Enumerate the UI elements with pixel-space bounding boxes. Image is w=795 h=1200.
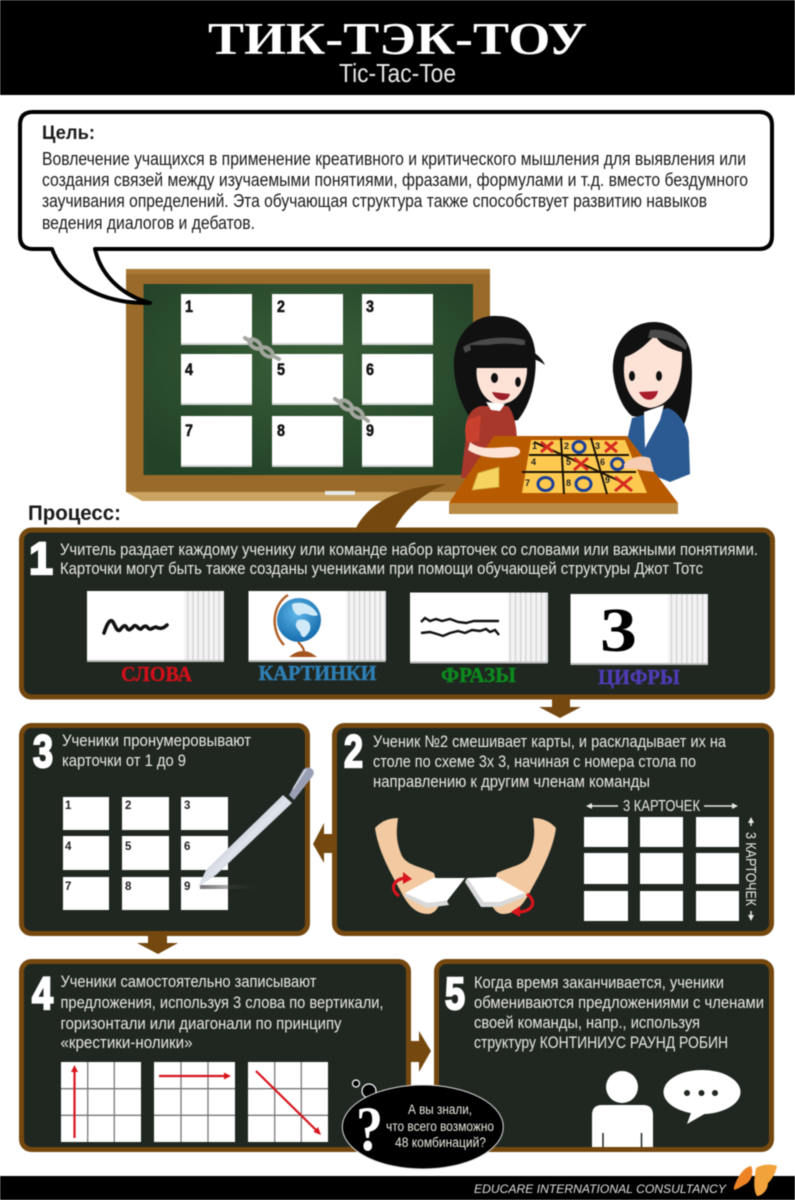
card 7 xyxy=(181,416,252,467)
step 2 text: столе по схеме 3х 3, начиная с номера стола по xyxy=(373,752,696,771)
numbered cards grid: 7 xyxy=(65,881,71,893)
numbered cards grid: 9 xyxy=(184,881,190,893)
diagram: diagonal line xyxy=(248,1062,328,1142)
arrow: step 1 to step 2 xyxy=(539,699,581,718)
icon: pen xyxy=(198,768,314,889)
card 3: 3 xyxy=(366,297,374,316)
label: phrases: ФРАЗЫ xyxy=(441,663,516,687)
game grid: 2 xyxy=(564,441,569,451)
diagram: horizontal line xyxy=(154,1062,235,1142)
game grid: 3 xyxy=(595,441,600,451)
card 4: 4 xyxy=(185,360,193,379)
step 1 text: Карточки могут быть также созданы учениками при помощи обучающей структуры Джот Тотс xyxy=(60,559,703,578)
step number 2: 2 xyxy=(344,726,363,777)
character: left girl xyxy=(454,316,545,478)
process heading: Процесс: xyxy=(28,502,121,525)
step number 4: 4 xyxy=(32,968,53,1019)
game grid: 9 xyxy=(605,475,610,485)
icon: globe xyxy=(275,595,321,656)
step 4 text: «крестики-нолики» xyxy=(60,1033,192,1052)
numbered cards grid: 2 xyxy=(125,800,131,812)
game grid: 7 xyxy=(525,478,530,488)
step number 3: 3 xyxy=(33,726,53,777)
label: words: СЛОВА xyxy=(121,662,193,686)
step 5 text xyxy=(474,973,764,1052)
callout: did you know xyxy=(342,1080,503,1169)
game grid: 8 xyxy=(566,478,571,488)
icon: speech bubble xyxy=(664,1070,740,1124)
goal text: ведения диалогов и дебатов. xyxy=(42,213,255,233)
step 5 text: структуру КОНТИНИУС РАУНД РОБИН xyxy=(474,1033,728,1052)
table with tic-tac-toe game xyxy=(449,436,678,514)
icon: hands shuffling cards xyxy=(375,818,556,917)
card 5 xyxy=(272,354,343,405)
numbered cards grid: 5 xyxy=(125,841,132,853)
title: ТИК-ТЭК-ТОУ xyxy=(208,14,587,64)
icon: orange logo xyxy=(734,1165,777,1196)
header banner xyxy=(0,0,795,95)
game grid: 4 xyxy=(531,457,536,467)
step 4 text xyxy=(60,972,384,1052)
step number 5: 5 xyxy=(445,968,465,1019)
panel: step 2 xyxy=(334,726,772,934)
icon: person xyxy=(592,1071,653,1147)
arrow: step 3 to step 4 xyxy=(137,936,178,954)
panel: step 3 xyxy=(22,726,314,934)
left girl hand xyxy=(468,442,520,458)
card: phrases xyxy=(410,592,548,664)
step 4 text: предложения, используя 3 слова по вертикали, xyxy=(60,993,384,1012)
card 6 xyxy=(362,354,433,405)
numbered cards grid: 1 xyxy=(65,800,72,812)
right girl hand xyxy=(624,456,654,472)
card 5: 5 xyxy=(277,360,285,379)
card 1: 1 xyxy=(185,297,193,316)
step 4 text: горизонтали или диагонали по принципу xyxy=(60,1014,342,1033)
subtitle: Tic-Tac-Toe xyxy=(339,58,456,88)
numbered cards grid: 8 xyxy=(125,881,132,893)
label: 3 cards vertical: 3 КАРТОЧЕК xyxy=(742,832,759,906)
step 2 text xyxy=(373,732,727,791)
footer bar xyxy=(0,1176,795,1200)
goal text: заучивания определений. Эта обучающая структура также способствует развитию навыков xyxy=(42,191,707,211)
card: numbers: 3 xyxy=(600,597,637,665)
card 1 xyxy=(181,294,252,345)
arrow: step 2 to step 3 xyxy=(313,823,336,863)
numbered cards grid: 3 xyxy=(184,800,190,812)
card 6: 6 xyxy=(366,360,374,379)
label: pictures: КАРТИНКИ xyxy=(258,661,376,685)
sticky notes xyxy=(472,467,499,490)
step 5 text: Когда время заканчивается, ученики xyxy=(474,973,724,992)
chalkboard xyxy=(126,269,490,501)
step 2 text: Ученик №2 смешивает карты, и раскладывает их на xyxy=(373,732,727,751)
label: 3 cards horizontal xyxy=(586,798,738,815)
callout text: что всего возможно xyxy=(386,1119,494,1134)
numbered cards grid: 4 xyxy=(65,841,72,853)
game grid xyxy=(522,438,647,494)
arrow: step 4 to step 5 xyxy=(411,1031,431,1072)
card 9: 9 xyxy=(366,421,374,440)
card: pictures xyxy=(248,591,386,662)
numbered cards grid xyxy=(63,797,228,910)
game grid: 1 xyxy=(532,441,537,451)
step 3 text xyxy=(62,731,251,770)
card 8 xyxy=(272,416,343,467)
step 1 text xyxy=(60,540,758,578)
question mark: ? xyxy=(356,1093,383,1164)
step 5 text: своей команды, напр., используя xyxy=(474,1013,700,1032)
card 2 xyxy=(272,294,343,345)
callout text: А вы знали, xyxy=(408,1102,472,1117)
card: words xyxy=(87,591,224,662)
step 3 text: карточки от 1 до 9 xyxy=(62,751,186,770)
card: numbers xyxy=(570,594,708,665)
callout text xyxy=(386,1102,494,1150)
panel: step 5 xyxy=(436,962,772,1150)
label: 3 cards horizontal: 3 КАРТОЧЕК xyxy=(623,798,700,815)
speech bubble: goal xyxy=(20,112,772,303)
card 2: 2 xyxy=(277,297,285,316)
step 3 text: Ученики пронумеровывают xyxy=(62,731,251,750)
step 2 text: направлению к другим членам команды xyxy=(373,772,650,791)
numbered cards grid: 6 xyxy=(184,841,190,853)
goal text xyxy=(42,149,748,233)
step number 1: 1 xyxy=(29,533,53,584)
connector curve from board to step 1 xyxy=(356,484,446,528)
card 8: 8 xyxy=(277,421,285,440)
card 7: 7 xyxy=(185,421,193,440)
game grid: 6 xyxy=(600,457,605,467)
card 9 xyxy=(362,416,433,467)
panel: step 4 xyxy=(22,962,408,1150)
callout text: 48 комбинаций? xyxy=(395,1135,486,1150)
chain link bottom xyxy=(335,398,368,421)
character: right girl xyxy=(613,322,692,482)
card 4 xyxy=(181,354,252,405)
label: digits: ЦИФРЫ xyxy=(598,665,680,689)
footer text: EDUCARE INTERNATIONAL CONSULTANCY xyxy=(474,1182,727,1196)
goal heading: Цель: xyxy=(42,122,95,144)
card 3 xyxy=(362,294,433,345)
diagram: vertical line xyxy=(61,1062,141,1142)
step 5 text: обмениваются предложениями с членами xyxy=(474,993,764,1012)
chain link top xyxy=(245,337,279,359)
game grid: 5 xyxy=(566,457,571,467)
layout grid of blank cards xyxy=(584,817,739,921)
step 4 text: Ученики самостоятельно записывают xyxy=(60,972,317,991)
panel: step 1 xyxy=(22,530,772,697)
